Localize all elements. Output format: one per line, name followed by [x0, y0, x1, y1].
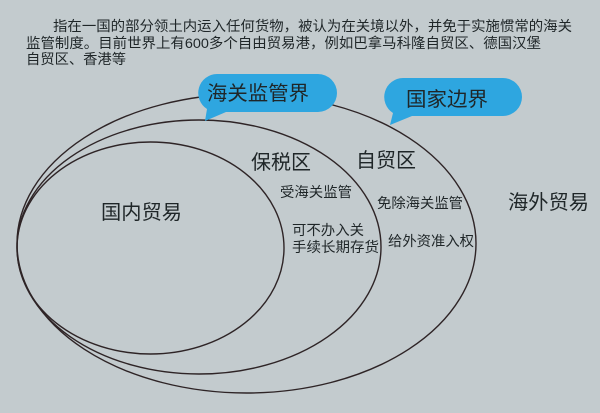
ellipse: domestic trade: [17, 142, 284, 354]
callout: customs boundary: [198, 74, 337, 121]
label: overseas trade: 海外贸易: [508, 191, 589, 214]
text: no customs formalities, long-term storage: 手续长期存货: [292, 239, 379, 255]
intro text block: [26, 18, 572, 67]
intro text block: 指在一国的部分领土内运入任何货物，被认为在关境以外，并免于实施惯常的海关: [53, 18, 572, 34]
text: foreign capital access: 给外资准入权: [388, 233, 474, 249]
text: no customs formalities, long-term storage: 可不办入关: [292, 222, 364, 238]
callout: national border: [384, 78, 522, 125]
ellipse: customs boundary: [17, 120, 381, 374]
intro text block: 自贸区、香港等: [26, 51, 126, 67]
label: domestic trade: 国内贸易: [101, 201, 182, 224]
nested ellipses diagram: [17, 94, 476, 393]
callout: national border: 国家边界: [406, 88, 488, 111]
callout: customs boundary: 海关监管界: [207, 82, 309, 105]
label: bonded zone: 保税区: [251, 151, 311, 174]
text: no customs formalities, long-term storage: [292, 222, 379, 255]
text: subject to customs supervision: 受海关监管: [280, 184, 352, 200]
intro text block: 监管制度。目前世界上有600多个自由贸易港，例如巴拿马科隆自贸区、德国汉堡: [26, 35, 541, 51]
label: free trade zone: 自贸区: [356, 149, 416, 172]
ellipse: national border: [17, 94, 476, 393]
text: exempt from customs supervision: 免除海关监管: [377, 195, 463, 211]
